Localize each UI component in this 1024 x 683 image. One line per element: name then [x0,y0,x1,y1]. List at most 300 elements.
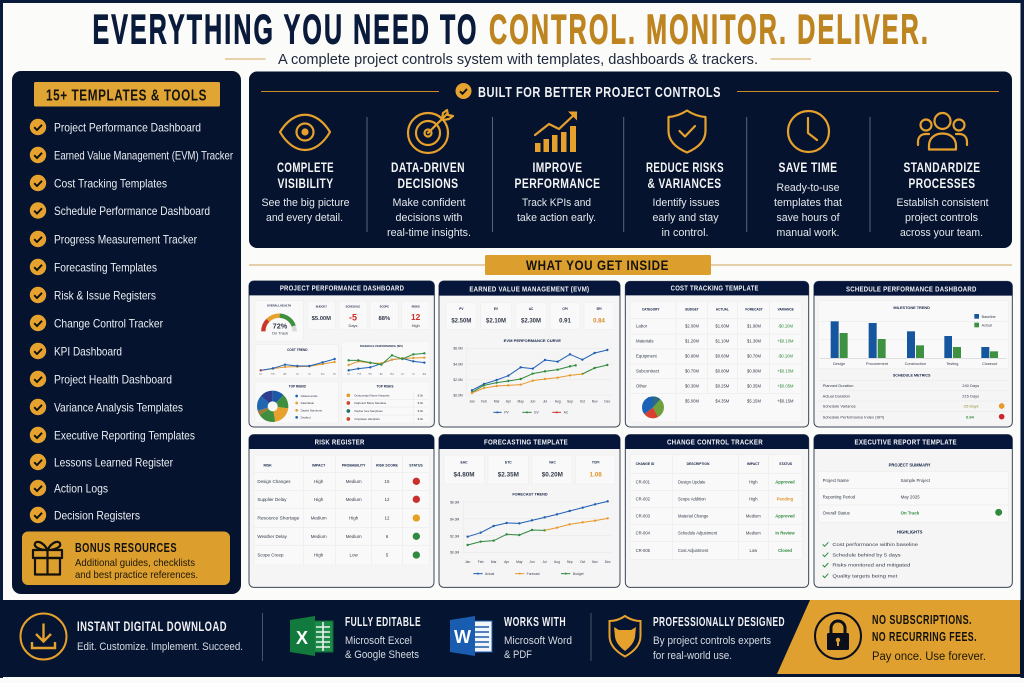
feature: fully editable [290,614,421,661]
chart: cost pie [647,402,658,413]
table: top risks: Dontyostap Klaore Hanpdes [354,393,390,397]
table: risks: RISK SCORE [376,464,399,468]
heading: BUILT FOR BETTER PROJECT CONTROLS [478,84,721,101]
chart: EVM performance curve: $6.0M [453,347,463,351]
chart: forecast trend: Jun [529,560,535,564]
chart: forecast trend: Budget [573,572,584,576]
feature: save time: save hours of [776,212,840,224]
chart: donut: Dealted [301,415,311,419]
table: risks: Weather Delay [257,534,288,539]
chart: schedule performance [342,341,430,378]
table: costs: ACTUAL [716,307,729,311]
kpi: EAC: EAC [460,460,468,464]
table: risks: 5 [386,553,389,558]
chart: EVM performance curve: Apr [506,399,512,403]
table: schedule metrics: Planned Duration [823,383,853,388]
table: risks: 12 [384,515,390,520]
kpi: TCPI: 1.08 [589,471,602,478]
table: top risks: $.0k [418,393,424,397]
feature: improve performance: PERFORMANCE [514,176,600,191]
chart: forecast trend: Actual [485,572,495,576]
table: costs: $0.70M [685,368,699,373]
feature: improve performance: Track KPIs and [522,197,591,209]
table: changes: Scope Addition [678,497,706,502]
panel: no subscriptions: Pay once. Use forever. [872,651,986,663]
feature: complete visibility [262,115,350,224]
list: highlights: Risks monitored and mitigated [832,563,911,568]
table: costs: $0.60M [715,354,730,359]
chart: EVM performance curve: PV [504,411,510,415]
table: changes: High [749,497,758,502]
table: costs: +$0.10M [777,339,794,344]
table: schedule metrics: -25 Days [963,404,979,409]
list item [30,480,108,496]
icon: excel: X [296,628,308,648]
table: costs: BUDGET [685,307,699,311]
kpi: SPI: 0.84 [593,319,605,325]
chart: forecast trend: FORECAST TREND [512,493,548,497]
card: change control tracker: CHANGE CONTROL TRACKER [667,439,763,446]
feature: improve performance [514,112,600,224]
kpi: EV [481,302,512,330]
feature: save time [774,111,842,239]
badge: 15+ templates and tools [34,82,220,106]
table: risks: RISK [264,464,272,468]
table: project summary: Overall Status [823,511,850,516]
feature: reduce risks and variances: REDUCE RISKS [646,160,724,175]
kpi: EV: $2.10M [486,319,506,325]
table: costs: $5.00M [685,399,699,404]
chart: EVM performance curve: $4.0M [453,362,463,366]
table: risks: High [314,479,324,484]
table: schedule metrics: Schedule Variance [823,404,857,409]
feature: fully editable: Microsoft Excel [345,635,412,647]
feature: data-driven decisions: DECISIONS [398,176,458,191]
table: costs: Materials [636,339,654,344]
icon: heading check [456,83,472,99]
table: costs: $1.30M [747,339,761,344]
table: risks: Low [350,553,359,558]
list item [30,119,201,135]
chart: schedule performance: May [390,373,394,375]
chart: schedule performance: Feb [358,373,362,375]
kpi: risks: 12 [411,312,421,322]
table: costs: Labor [636,324,648,329]
chart: cost trend: Jun [296,373,299,375]
feature: standardize processes: STANDARDIZE [904,160,980,175]
card: cost tracking template: COST TRACKING TEMPLATE [671,286,759,293]
feature: professionally designed: for real-world use. [653,650,732,662]
chart: cost trend: Dec [333,373,336,375]
list item: Executive Reporting Templates [54,428,195,442]
feature: instant digital download [20,614,243,660]
list item: Action Logs [54,482,108,496]
chart: cost trend: Feb [271,373,276,375]
table: costs: $0.30M [685,383,699,388]
table: schedule metrics: 215 Days [962,393,979,398]
table: top risks: $.0k [418,417,424,421]
kpi: SPI: SPI [596,307,602,311]
table: changes: IMPACT [747,462,760,466]
list item: Change Control Tracker [54,316,163,330]
table: schedule metrics: 0.94 [966,414,975,419]
feature: data-driven decisions: Make confident [392,197,466,209]
list item: Project Health Dashboard [54,372,172,386]
kpi: ETC: $2.35M [498,471,519,478]
chart: EVM performance curve: Jun [530,399,535,403]
chart: EVM performance curve: EV [534,411,540,415]
kpi: schedule [339,301,367,330]
table: changes: CHANGE ID [636,462,655,466]
table: project summary: PROJECT SUMMARY [889,463,931,468]
table: top risks [342,381,430,423]
gauge: overall health [255,301,303,341]
list item [30,259,157,275]
table: costs: VARIANCE [778,307,794,311]
table: costs: -$0.10M [778,354,793,359]
panel: built for better project controls [249,72,1012,248]
table: changes: CR-005 [636,548,651,553]
chart: schedule performance: SCHEDULE PERFORMANCE (SPI) [360,344,403,348]
badge: 15+ templates and tools: 15+ TEMPLATES & TOOLS [46,88,207,104]
icon: target [408,110,453,153]
feature: improve performance: take action early. [517,212,596,224]
kpi: schedule: SCHEDULE [346,305,361,309]
table: schedule metrics: Actual Duration [823,393,850,398]
list item [30,343,122,359]
table: risks: Scope Creep [257,553,284,558]
kpi: scope [370,301,398,330]
chart: EVM performance curve: Oct [580,399,585,403]
card: forecasting template: FORECASTING TEMPLATE [484,439,568,446]
feature: save time: templates that [774,197,842,209]
table: changes: Schedule Adjustment [678,531,718,536]
kpi: TCPI [576,455,615,484]
card: project performance dashboard: PROJECT PERFORMANCE DASHBOARD [280,286,404,293]
chart: schedule performance: Jun [401,373,404,375]
chart: milestone trend: Baseline [982,315,996,319]
list item [30,315,163,331]
chart: schedule performance: Jan [347,373,350,375]
table: costs: $2.00M [685,324,699,329]
table: costs: $0.25M [715,383,730,388]
callout: bonus resources [22,532,230,585]
icon: people [918,113,967,150]
table: top risks: Cinpidaps Hanpfatrs [354,417,381,421]
table: costs: $4.35M [715,399,730,404]
table: changes: In Review [775,531,795,536]
table: costs: $0.70M [747,354,761,359]
chart: milestone trend: MILESTONE TREND [893,306,930,310]
feature: works with [450,614,572,661]
chart: EVM performance curve: May [518,399,524,403]
kpi: VAC: VAC [549,460,556,464]
table: risks [254,455,429,565]
list item [30,175,167,191]
feature: standardize processes [896,113,988,239]
kpi: schedule: Days [348,323,358,328]
table: changes: Approved [775,514,795,519]
table: costs: Equipment [636,354,657,359]
table: top risks: Dayher loss Sanphaes [354,409,383,413]
subtitle: A complete project controls system with templates, dashboards & trackers. [278,52,758,68]
chart: schedule performance: Jul [412,373,415,375]
list item: Cost Tracking Templates [54,176,167,190]
chart: EVM performance curve: EVM PERFORMANCE CURVE [504,339,561,343]
card: risk register: RISK REGISTER [315,439,365,446]
list item [30,454,173,470]
chart: cost trend: Jul [308,373,311,375]
list item: Forecasting Templates [54,260,157,274]
kpi: AC: $2.30M [521,319,541,325]
table: changes: Closed [778,548,792,553]
table: risks: Medium [346,479,362,484]
gauge: overall health: 72% [273,321,288,330]
table: changes: Medium [746,531,761,536]
table: costs: FORECAST [745,307,763,311]
table: project summary: Sample Project [901,478,931,483]
table: costs: $1.60M [715,324,730,329]
kpi: EV: EV [494,307,499,311]
table: costs: +$0.10M [777,368,794,373]
feature: reduce risks and variances [646,110,724,239]
feature: save time: SAVE TIME [778,160,838,175]
feature: reduce risks and variances: in control. [662,227,708,239]
feature: reduce risks and variances: early and stay [652,212,719,224]
icon: eye [280,115,330,150]
table: costs: $0.35M [747,383,761,388]
table: changes: Approved [775,480,795,485]
list item [30,231,197,247]
list item: KPI Dashboard [54,344,122,358]
chart: forecast trend: May [516,560,523,564]
card: earned value management [439,281,620,427]
table: changes: CR-003 [636,514,651,519]
list item: Progress Measurement Tracker [54,232,197,246]
table: changes [630,455,802,559]
chart: forecast trend: $4.0M [450,517,460,521]
list item [30,147,233,163]
feature: save time: manual work. [776,227,840,239]
kpi: TCPI: TCPI [592,460,600,464]
table: changes: Medium [746,514,761,519]
chart: forecast trend: Dec [605,560,611,564]
panel: no subscriptions [777,600,1020,674]
table: schedule metrics: Schedule Performance Index (SPI) [823,414,885,419]
chart: schedule performance: Apr [380,372,383,375]
icon: rising chart [535,112,577,152]
feature: data-driven decisions: DATA-DRIVEN [391,160,465,175]
list item [30,507,140,523]
chart: forecast trend: $2.0M [450,534,460,538]
feature: complete visibility: See the big picture [262,197,350,209]
chart: EVM performance curve: Feb [481,399,487,403]
chart: forecast trend: Apr [504,560,510,564]
chart: schedule performance: Aug [423,372,426,375]
card: executive report template: EXECUTIVE REPORT TEMPLATE [854,439,957,446]
table: risks: Medium [311,534,327,539]
kpi: VAC [532,455,572,484]
panel: no subscriptions: NO RECURRING FEES. [872,629,977,644]
list item: Schedule Performance Dashboard [54,204,210,218]
table: changes: Cost Adjustment [678,548,709,553]
table: risks: 6 [386,534,389,539]
kpi: schedule: -5 [349,312,357,322]
list: highlights: Quality targets being met [832,573,898,578]
chart: forecast trend: $6.0M [450,500,460,504]
feature: improve performance: IMPROVE [532,160,582,175]
chart: donut: Dawist Namitone [301,408,322,412]
table: top risks: TOP RISKS [377,385,393,389]
kpi: scope: 88% [378,316,391,322]
gauge: overall health: On Track [272,331,288,336]
kpi: AC: AC [529,307,534,311]
table: changes: CR-001 [636,480,651,485]
table: schedule metrics: SCHEDULE METRICS [893,374,931,378]
table: project summary: On Track [901,511,920,516]
chart: milestone trend: Actual [982,324,992,328]
panel: no subscriptions: NO SUBSCRIPTIONS. [872,612,972,627]
table: changes: DESCRIPTION [687,462,710,466]
kpi: budget: BUDGET [316,305,327,309]
feature: professionally designed: By project controls experts [653,635,771,647]
table: costs: $0.90M [747,368,761,373]
callout: bonus resources: BONUS RESOURCES [75,541,177,555]
card: cost tracking template [625,281,809,427]
chart: milestone trend: Procurement [866,362,889,366]
card: schedule performance dashboard: SCHEDULE PERFORMANCE DASHBOARD [846,286,977,293]
kpi: EAC: $4.80M [453,471,475,478]
table: changes: Design Update [678,480,706,485]
chart: donut: Dawnfaide [301,401,314,405]
feature: reduce risks and variances: & VARIANCES [648,176,722,191]
chart: EVM performance curve: Jan [469,399,475,403]
table: risks: PROBABILITY [342,464,366,468]
table: costs: $0.80M [685,354,699,359]
feature: standardize processes: PROCESSES [908,176,976,191]
list item: Earned Value Management (EVM) Tracker [54,148,233,162]
chart: milestone trend: Construction [905,362,926,366]
card: schedule performance dashboard [814,281,1012,427]
chart: EVM performance curve: AC [564,411,569,415]
list item [30,202,210,219]
kpi: scope: SCOPE [380,305,389,309]
chart: milestone trend: Testing [946,362,958,366]
table: top risks: $.0k [418,409,424,413]
table: changes: CR-002 [636,497,651,502]
chart: EVM performance curve: Nov [592,399,598,403]
kpi: ETC: ETC [505,460,512,464]
table: costs: $1.20M [685,339,699,344]
chart: forecast trend: $0.0M [450,551,460,555]
table: changes: Material Change [678,514,709,519]
panel: templates and tools list [12,71,241,594]
list item [30,399,183,415]
table: changes: Low [750,548,758,553]
chart: EVM performance curve: Mar [494,399,500,403]
icon: clock [788,111,829,152]
card: forecasting template [439,435,620,587]
table: risks: 12 [384,497,390,502]
feature: works with: WORKS WITH [504,614,566,629]
feature: fully editable: & Google Sheets [345,649,419,661]
chart: EVM performance curve: Dec [604,399,611,403]
table: costs: $1.10M [715,339,730,344]
chart: donut [255,381,338,423]
chart: cost trend [255,345,338,378]
table: risks: IMPACT [312,464,326,468]
feature: fully editable: FULLY EDITABLE [345,614,421,629]
feature: professionally designed: PROFESSIONALLY DESIGNED [653,614,785,629]
feature: data-driven decisions: real-time insights. [387,227,471,239]
list item: Risk & Issue Registers [54,288,156,302]
table: schedule metrics: 240 Days [962,383,979,388]
table: costs: $5.15M [747,399,761,404]
banner: what you get inside [485,255,711,275]
card: earned value management: EARNED VALUE MANAGEMENT (EVM) [469,286,589,293]
table: project summary: May 2025 [901,494,920,499]
chart: forecast trend: Feb [478,560,484,564]
feature: complete visibility: and every detail. [266,212,343,224]
list: highlights: Cost performance within baseline [832,542,919,547]
chart: EVM performance curve: Sep [567,399,573,403]
kpi: budget: $5.00M [312,316,331,322]
chart: forecast trend: Jul [543,560,547,564]
kpi: CPI: 0.91 [559,319,571,325]
chart: forecast trend: Oct [580,560,585,564]
icon: lock [815,613,861,659]
table: risks: Medium [346,534,362,539]
list: highlights: HIGHLIGHTS [897,530,923,535]
feature: reduce risks and variances: Identify issues [652,197,720,209]
icon: word: W [454,627,471,647]
icon: shield [610,616,640,656]
chart: EVM performance curve: Aug [555,399,561,403]
chart: milestone trend: Closeout [982,362,998,366]
table: costs [630,301,802,422]
kpi: CPI: CPI [562,307,568,311]
table: costs: $1.90M [747,324,761,329]
chart: schedule performance: Mar [369,372,372,375]
table: risks: Resource Shortage [257,515,300,520]
table: project summary: Reporting Period [823,494,856,499]
feature: professionally designed [610,614,785,662]
table: risks: STATUS [409,464,423,468]
feature: instant digital download: Edit. Customize. Implement. Succeed. [77,641,243,653]
chart: donut: Dataremonite [301,394,318,398]
table: costs: -$0.10M [778,324,793,329]
table: changes: High [749,480,758,485]
chart: donut: TOP RIEND [289,385,307,389]
table: risks: Design Changes [257,479,291,484]
chart: milestone trend: Design [833,362,845,366]
chart: cost trend: Jan [259,373,262,375]
card: change control tracker [625,435,809,587]
list item: Variance Analysis Templates [54,400,183,414]
list item [30,371,172,387]
chart: cost trend: COST TREND [287,348,308,352]
table: changes: STATUS [779,462,793,466]
kpi: risks [402,301,430,330]
kpi: budget [307,301,336,330]
chart: cost trend: Apr [283,372,287,375]
chart: forecast trend: Mar [491,560,497,564]
kpi: AC [515,302,547,330]
table: risks: High [349,515,359,520]
list item: Decision Registers [54,508,140,522]
gauge: overall health: OVERALL HEALTH [267,304,291,308]
chart: forecast trend [450,493,612,576]
